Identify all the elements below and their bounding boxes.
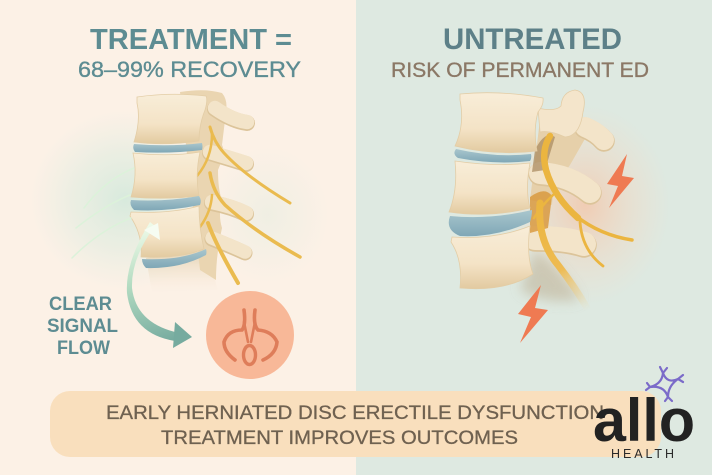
heading: treatment: 68–99% RECOVERY <box>78 57 301 82</box>
disc 2 <box>449 210 532 236</box>
disc 3 <box>142 249 206 268</box>
vertical plate <box>530 120 590 205</box>
orange glow behind right spine <box>500 105 670 305</box>
spinous process shadows <box>210 109 247 253</box>
label: clear signal flow <box>47 294 118 359</box>
signal lines <box>72 168 134 258</box>
illustration: untreated spine <box>449 90 632 308</box>
label: clear signal flow: SIGNAL <box>47 316 118 337</box>
nerves <box>197 127 300 283</box>
teal glow right of left spine <box>206 145 330 285</box>
heading: treatment <box>78 24 301 82</box>
logo wordmark: allo <box>593 387 695 454</box>
illustration: healthy spine <box>130 90 300 292</box>
compressed nerve area <box>530 191 552 233</box>
logo star <box>646 367 683 401</box>
dark gap <box>532 135 555 172</box>
vertebra 1 <box>134 94 207 144</box>
vertebra 2 <box>449 161 530 214</box>
vertebra 1 <box>455 93 543 153</box>
disc 1 <box>133 143 202 153</box>
vertical plate behind nerves <box>180 90 226 280</box>
heading: treatment: TREATMENT = <box>90 24 292 56</box>
vertebra 3 <box>130 206 204 257</box>
transverse process shadows <box>535 128 604 245</box>
label: clear signal flow: FLOW <box>57 338 110 359</box>
top knob <box>538 90 584 137</box>
icon: pelvic organ circle <box>206 291 294 379</box>
transverse processes <box>535 127 604 244</box>
disc 2 <box>130 196 201 210</box>
green glow behind left spine <box>30 110 220 290</box>
icon: lightning bolt lower <box>518 285 548 343</box>
icon: lightning bolt upper <box>607 154 634 208</box>
banner text: TREATMENT IMPROVES OUTCOMES <box>161 428 518 449</box>
disc 1 <box>454 149 531 162</box>
label: clear signal flow: CLEAR <box>49 294 112 315</box>
logo: allo health <box>593 367 695 461</box>
panel: untreated background <box>356 0 712 475</box>
panel: treatment background <box>0 0 356 475</box>
arrow: signal flow <box>127 222 192 348</box>
heading: untreated <box>391 23 649 82</box>
logo subtitle: HEALTH <box>611 447 674 461</box>
heading: untreated: UNTREATED <box>443 23 622 56</box>
heading: untreated: RISK OF PERMANENT ED <box>391 59 649 82</box>
vertebra 3 <box>451 226 533 289</box>
spinal column fade <box>146 250 218 292</box>
nerves <box>534 136 632 308</box>
shadow beneath spine <box>520 250 580 301</box>
spinous processes <box>210 108 247 252</box>
vertebra 2 <box>131 152 200 198</box>
banner text: EARLY HERNIATED DISC ERECTILE DYSFUNCTION <box>106 403 604 424</box>
banner <box>50 391 661 457</box>
banner text <box>106 403 604 449</box>
